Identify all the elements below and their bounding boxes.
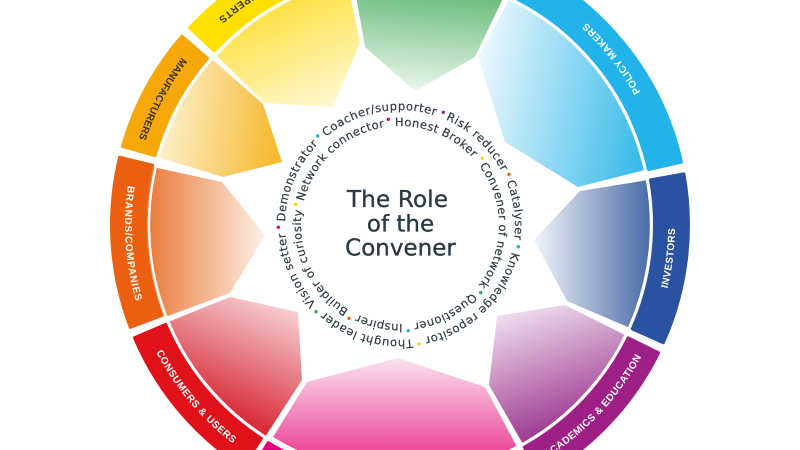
label: brands and companies: BRANDS/COMPANIES [124, 186, 142, 300]
segment: green [355, 0, 507, 91]
segment: manufacturers [120, 34, 282, 177]
title [345, 187, 456, 262]
wedge: academics and education [489, 305, 625, 444]
segment: brands and companies [110, 156, 265, 329]
role: network connector: Network connector [296, 120, 384, 200]
dots: inner ring separators [294, 118, 484, 332]
role: coacher: Coacher/supporter [322, 104, 438, 136]
label: policy makers: POLICY MAKERS [582, 24, 640, 95]
wedge: experts [217, 0, 360, 107]
band: policy makers [504, 0, 682, 170]
band: manufacturers [122, 36, 208, 156]
segment: consumers and users [132, 297, 302, 450]
segment: experts [188, 0, 360, 107]
wedge: policy makers [478, 0, 645, 187]
title: The Role [346, 187, 448, 213]
label: manufacturers: MANUFACTURERS [140, 58, 187, 140]
title: of the [367, 212, 434, 238]
dots: outer ring separators [277, 111, 520, 346]
segment: investors [534, 172, 690, 344]
outer ring of roles [276, 104, 523, 349]
role: knowledge repositor: Knowledge repositor [426, 253, 520, 344]
band: experts [190, 0, 382, 51]
wedge: manufacturers [157, 59, 282, 177]
role: demonstrator: Demonstrator [276, 140, 316, 221]
role: inspirer: Inspirer [354, 315, 402, 332]
segment: pink [251, 358, 532, 450]
role: convener of network: Convener of network [478, 162, 508, 289]
role: thought leader: Thought leader [320, 313, 414, 349]
label: investors: INVESTORS [660, 228, 676, 288]
inner ring of roles [292, 118, 508, 332]
title: Convener [345, 236, 456, 262]
segment: academics and education [489, 305, 660, 450]
role: builder of curiosity: Builder of curiosity [292, 210, 348, 316]
wedge: brands and companies [147, 167, 265, 317]
band: investors [632, 174, 688, 343]
wedge: pink [273, 358, 517, 450]
role: honest broker: Honest Broker [396, 118, 478, 156]
segment: policy makers [478, 0, 683, 187]
role: catalyser: Catalyser [508, 180, 523, 240]
wedge: green [355, 0, 507, 91]
band: brands and companies [112, 157, 162, 327]
wedge: consumers and users [168, 297, 302, 437]
wedge: investors [534, 180, 652, 328]
role: vision setter: Vision setter [278, 234, 314, 310]
role: risk reducer: Risk reducer [446, 112, 508, 170]
band: academics and education [524, 338, 659, 450]
band: pink [251, 443, 532, 450]
band: consumers and users [134, 324, 261, 450]
label: consumers and users: CONSUMERS & USERS [157, 350, 236, 442]
role: questioner: Questioner [414, 294, 476, 330]
